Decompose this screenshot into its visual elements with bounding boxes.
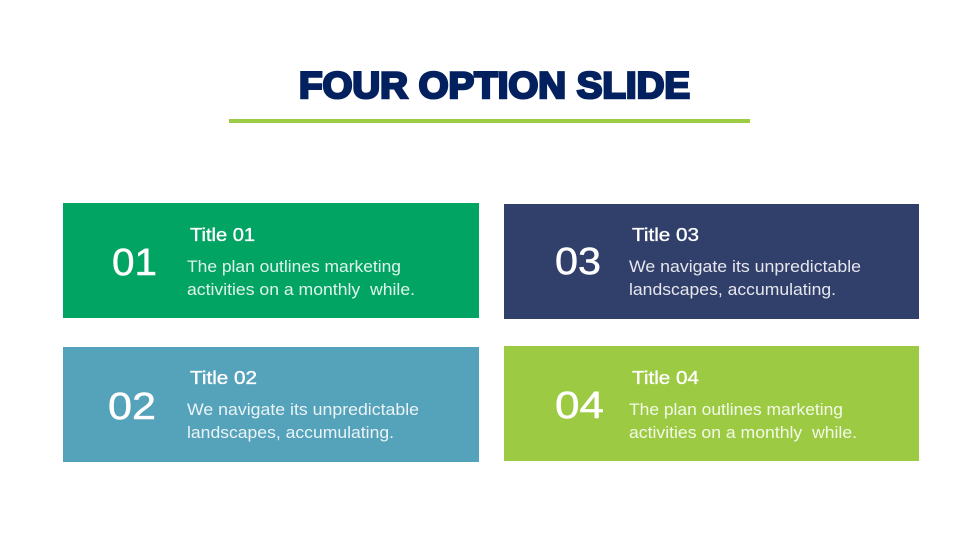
panel: option 03 xyxy=(504,204,919,319)
description 04: activities on a monthly while. xyxy=(629,423,857,442)
number 01: 01 xyxy=(112,242,157,284)
title: FOUR OPTION SLIDE xyxy=(299,65,690,106)
number 02: 02 xyxy=(108,386,156,428)
description 01: activities on a monthly while. xyxy=(187,280,415,299)
panel: option 01 xyxy=(63,203,479,318)
description 04: The plan outlines marketing xyxy=(629,400,843,419)
description 02: We navigate its unpredictable xyxy=(187,400,419,419)
description 03: We navigate its unpredictable xyxy=(629,257,861,276)
heading: Title 04: Title 04 xyxy=(632,368,699,388)
panel: option 02 xyxy=(63,347,479,462)
title underline xyxy=(229,119,750,123)
heading: Title 02: Title 02 xyxy=(190,368,257,388)
description 01: The plan outlines marketing xyxy=(187,257,401,276)
description 02: landscapes, accumulating. xyxy=(187,423,394,442)
number 03: 03 xyxy=(555,241,601,283)
panel: option 04 xyxy=(504,346,919,461)
number 04: 04 xyxy=(555,385,604,427)
description 03: landscapes, accumulating. xyxy=(629,280,836,299)
heading: Title 03: Title 03 xyxy=(632,225,699,245)
heading: Title 01: Title 01 xyxy=(190,225,255,245)
